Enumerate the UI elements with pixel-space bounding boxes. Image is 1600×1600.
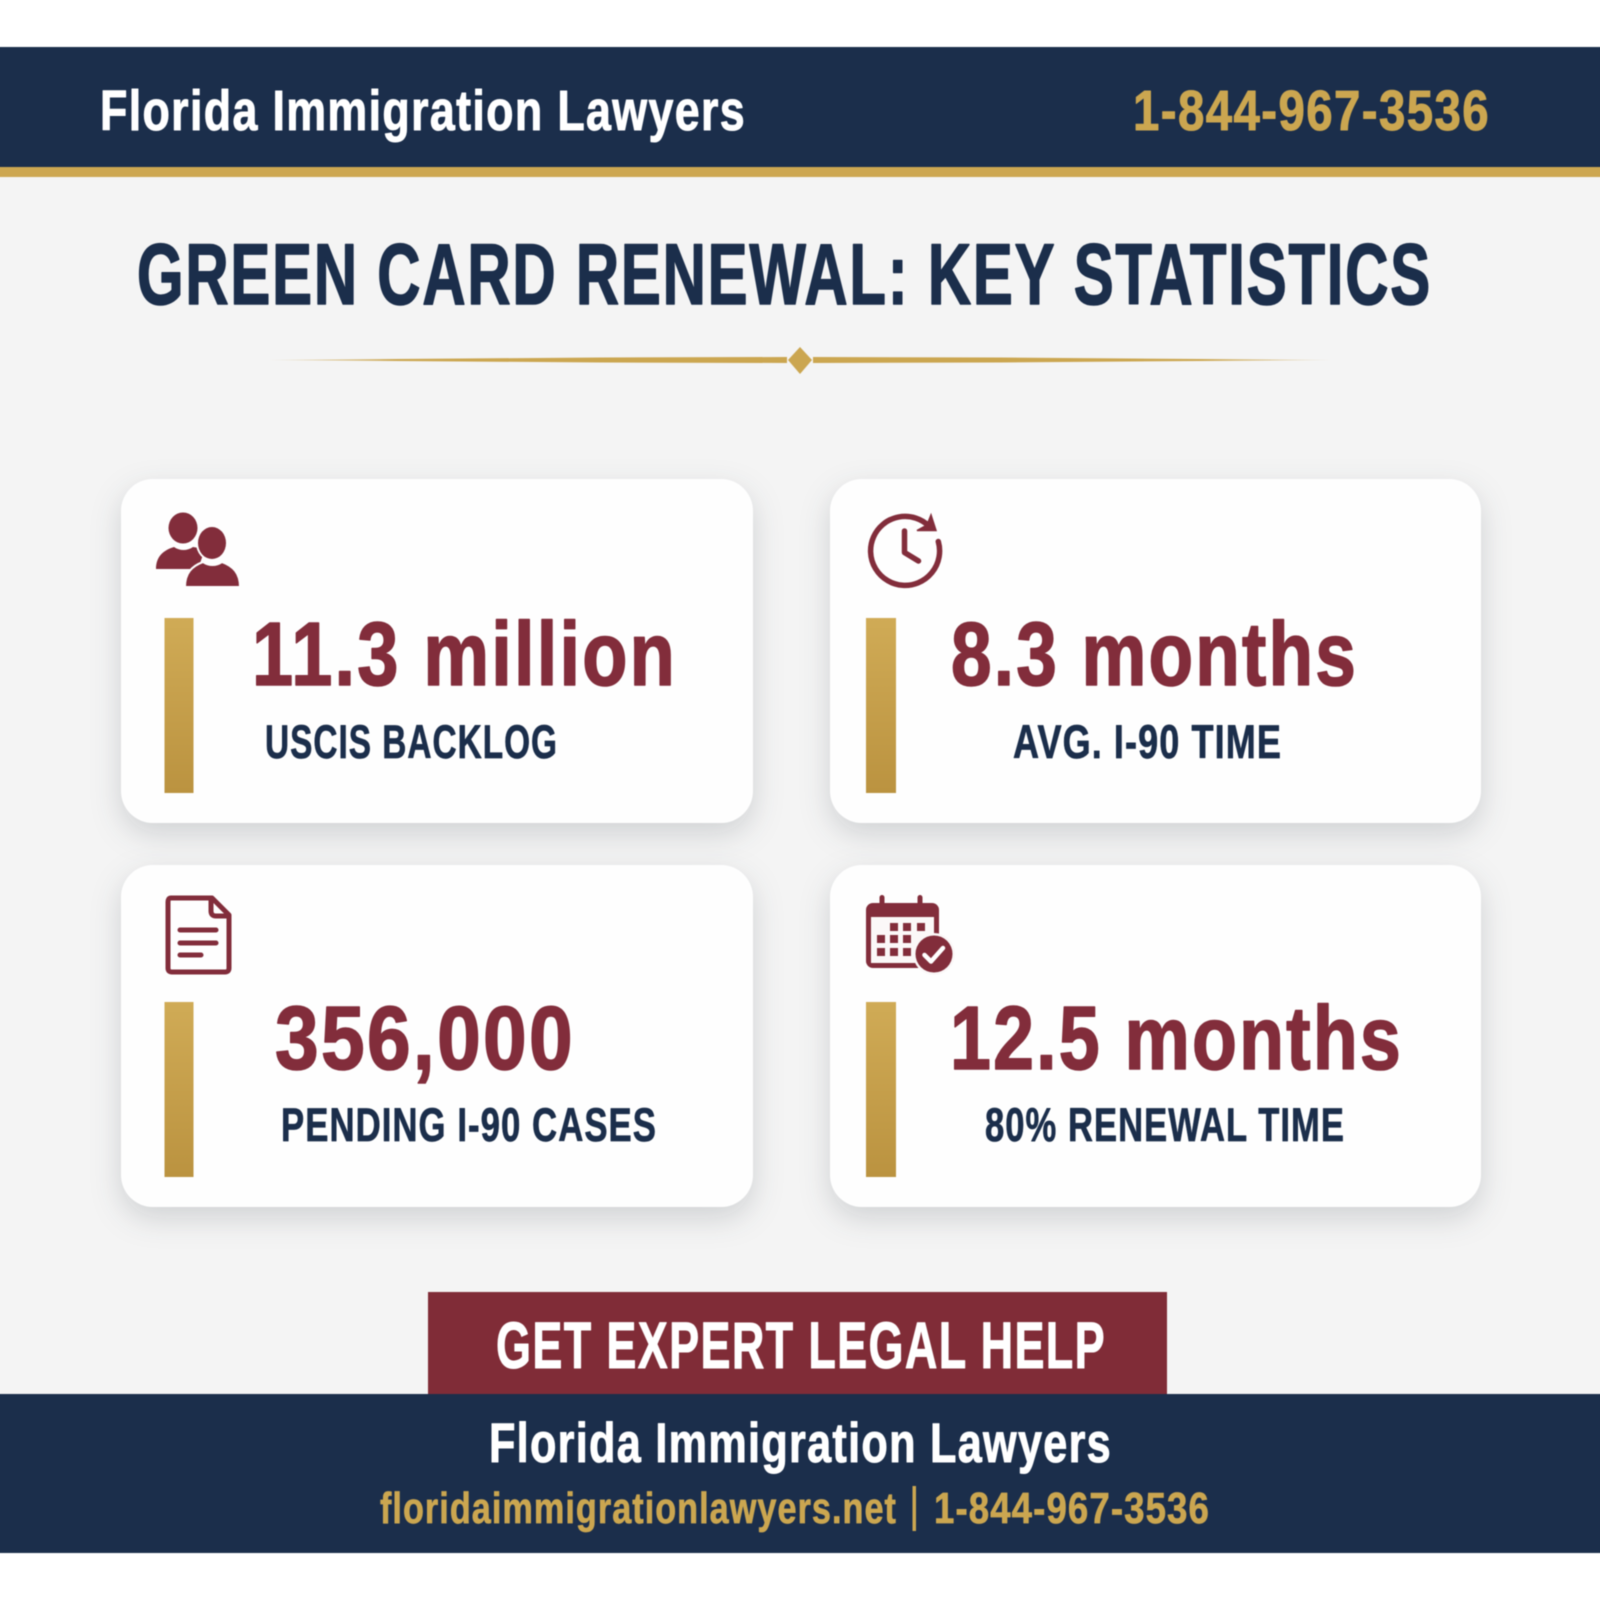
stat label: USCIS BACKLOG [265, 715, 558, 768]
footer phone number: 1-844-967-3536 [934, 1484, 1210, 1533]
stat label: PENDING I-90 CASES [281, 1098, 657, 1151]
header phone number: 1-844-967-3536 [1133, 79, 1490, 143]
stat value: 12.5 months [950, 989, 1403, 1089]
stat label: 80% RENEWAL TIME [985, 1098, 1345, 1151]
header band [0, 47, 1600, 177]
panel: pending I-90 cases [121, 865, 753, 1207]
icon: clock with arrow [871, 515, 940, 585]
call-to-action banner [428, 1292, 1167, 1395]
footer separator [912, 1486, 916, 1531]
call-to-action banner: GET EXPERT LEGAL HELP [496, 1308, 1106, 1382]
stat label: AVG. I-90 TIME [1013, 715, 1282, 768]
accent bar [866, 618, 896, 793]
footer band [0, 1394, 1600, 1553]
icon: people [156, 512, 240, 587]
panel: average I-90 time [830, 479, 1481, 823]
icon: calendar with check [866, 895, 955, 975]
icon: document [168, 898, 229, 972]
accent bar [164, 618, 194, 793]
panel: 80% renewal time [830, 865, 1481, 1207]
stat value: 356,000 [275, 989, 575, 1089]
header firm name: Florida Immigration Lawyers [100, 79, 746, 143]
accent bar [866, 1002, 896, 1177]
footer firm name: Florida Immigration Lawyers [489, 1411, 1112, 1474]
stat value: 11.3 million [252, 605, 677, 705]
footer website: floridaimmigrationlawyers.net [380, 1484, 897, 1533]
title divider with diamond [268, 347, 1332, 374]
accent bar [164, 1002, 194, 1177]
page background [0, 177, 1600, 1394]
panel: USCIS backlog [121, 479, 753, 823]
stat value: 8.3 months [951, 605, 1358, 705]
